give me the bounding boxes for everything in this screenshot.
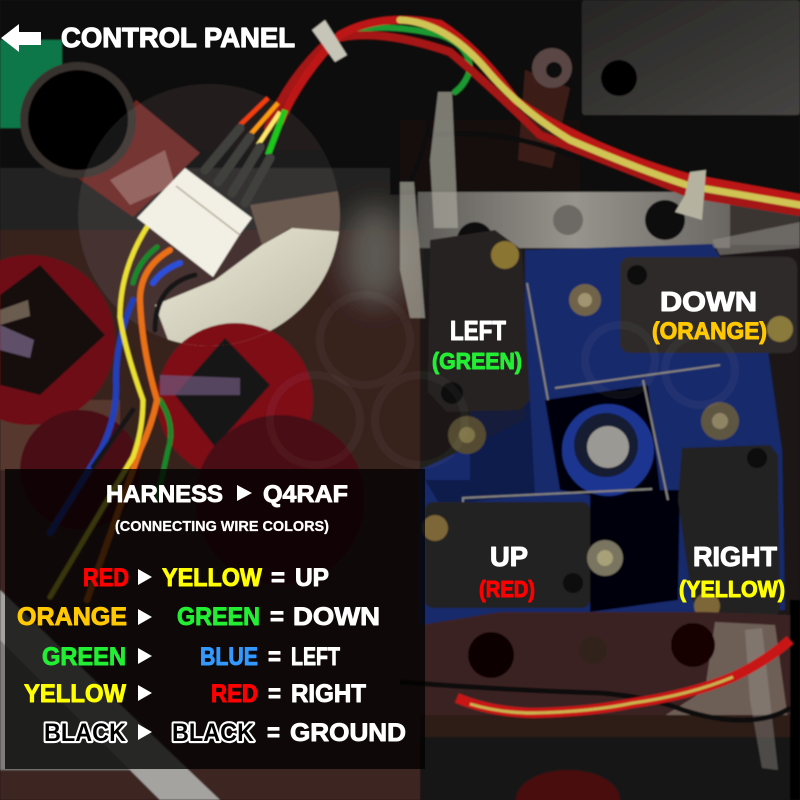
black heat shrink [205, 128, 270, 203]
row: ground: GROUND [290, 719, 406, 747]
clear crimp terminals [400, 92, 458, 318]
faint watermark rings [270, 295, 735, 465]
lever wires [463, 283, 720, 510]
row: right: RED [211, 680, 258, 708]
switch: right [678, 445, 780, 627]
row: left [42, 643, 340, 671]
row: ground: BLACK [44, 719, 126, 747]
red arcade buttons [0, 255, 365, 585]
clear connector top right [712, 222, 800, 255]
switch: down [620, 257, 797, 353]
white diagonal strip bottom left [0, 590, 220, 800]
row: down: DOWN [293, 603, 380, 631]
label: left green: (GREEN) [432, 348, 522, 374]
switch: up [422, 502, 590, 608]
label: left green [432, 315, 522, 374]
lower metal band [420, 600, 800, 800]
row: ground [44, 719, 406, 747]
row: down [17, 603, 380, 631]
label: down orange [652, 286, 767, 345]
label: up red: (RED) [479, 576, 535, 602]
row: up: YELLOW [162, 564, 262, 592]
joystick shaft [562, 404, 654, 496]
lower wires [400, 640, 790, 720]
tube [20, 62, 200, 217]
row: left: = [268, 643, 281, 671]
row: ground: BLACK [172, 719, 254, 747]
lower harness wires [50, 227, 195, 600]
cable ties [312, 20, 706, 220]
label: down orange: (ORANGE) [652, 318, 767, 345]
green circuit board [0, 40, 62, 128]
translucent logo circle [78, 84, 341, 348]
row: right: YELLOW [24, 680, 126, 708]
coloured wire ends [240, 98, 285, 155]
legend subheading: (CONNECTING WIRE COLORS) [115, 518, 329, 535]
row: ground: = [267, 719, 280, 747]
arrow pointing left [1, 24, 41, 52]
panel: wire colour legend [5, 469, 425, 769]
heading: CONTROL PANEL [61, 22, 295, 53]
legend heading: Q4RAF [263, 481, 348, 508]
black enclosure box [582, 0, 800, 115]
label: left green: LEFT [450, 315, 506, 346]
hex nuts [448, 284, 739, 576]
row: left: LEFT [291, 643, 340, 671]
legend heading: HARNESS [106, 481, 223, 508]
label: right yellow: (YELLOW) [679, 576, 785, 602]
row: left: GREEN [42, 643, 126, 671]
row: up [83, 564, 329, 592]
switch: left [428, 230, 530, 412]
legend heading [106, 481, 348, 508]
label: up red: UP [490, 541, 528, 572]
label: right yellow: RIGHT [693, 541, 777, 572]
wire nut [518, 48, 572, 168]
row: up: RED [83, 564, 129, 592]
clear connector right [745, 628, 778, 770]
metal strip [418, 192, 730, 248]
tan right side area [730, 195, 800, 245]
label: right yellow [679, 541, 785, 602]
row: down: ORANGE [17, 603, 127, 631]
white wiring connector [137, 168, 252, 277]
row: right: = [268, 680, 281, 708]
row: right: RIGHT [291, 680, 366, 708]
blue mounting plate [420, 244, 785, 625]
row: right [24, 680, 366, 708]
title: control panel with arrow [1, 22, 295, 53]
label: down orange: DOWN [660, 286, 757, 317]
label: up red [479, 541, 535, 602]
row: up: UP [295, 564, 329, 592]
row: down: GREEN [177, 603, 260, 631]
row: left: BLUE [200, 643, 258, 671]
upper wire bundle [268, 20, 800, 212]
row: up: = [271, 564, 285, 592]
screw post [150, 53, 182, 85]
row: down: = [270, 603, 284, 631]
